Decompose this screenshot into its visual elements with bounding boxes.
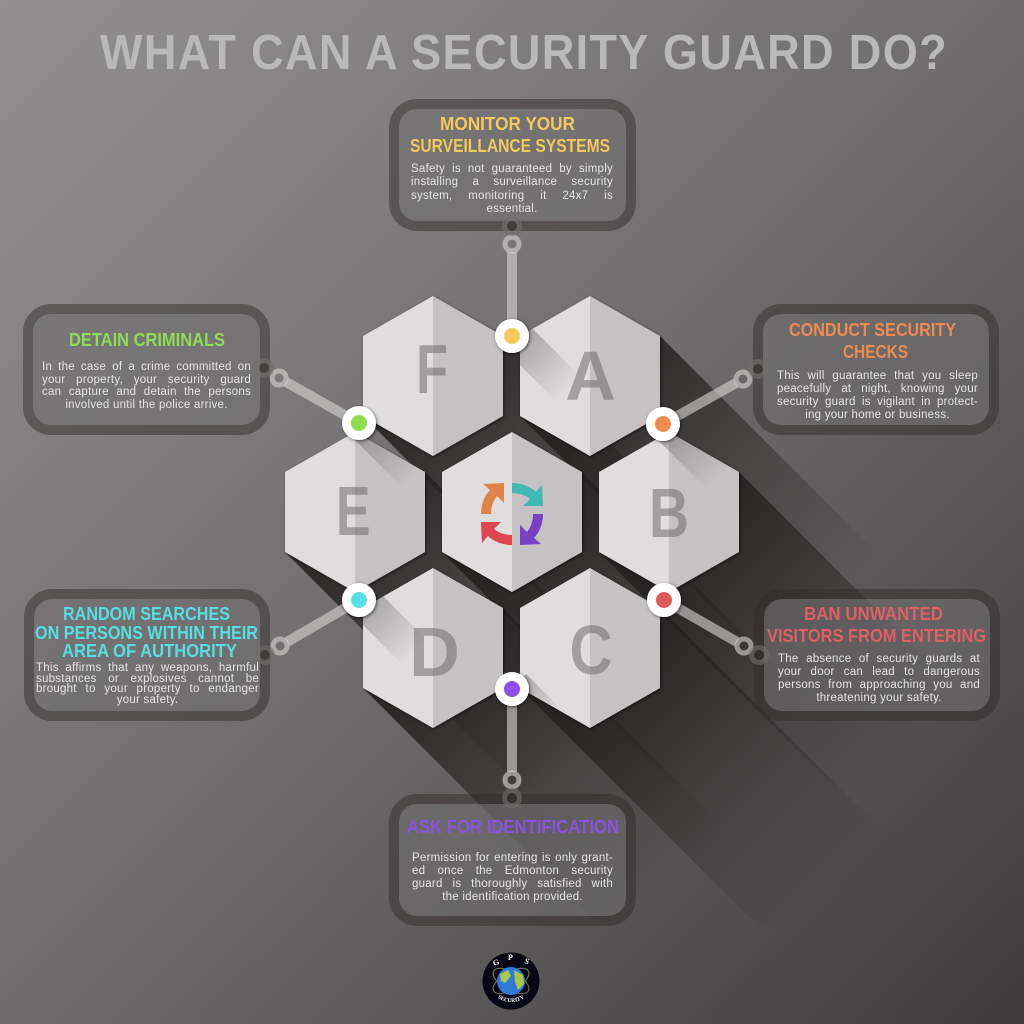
- text: random searches: brought to your property to endanger: [36, 683, 259, 695]
- text: monitor: system, monitoring it 24x7 is: [411, 190, 613, 202]
- hexagon C: [520, 568, 662, 729]
- panel: monitor your surveillance systems: [389, 99, 636, 236]
- panel: detain criminals: [23, 304, 274, 435]
- text: detain: [42, 361, 251, 410]
- hexagon C: C: [570, 611, 612, 689]
- text: ban unwanted: your door can lead to dangerous: [778, 666, 980, 678]
- text: detain: In the case of a crime committed on: [42, 361, 251, 373]
- heading: random searches: [35, 604, 258, 661]
- text: identification: [412, 852, 613, 903]
- heading: random searches: RANDOM SEARCHES: [63, 604, 230, 624]
- heading: random searches: AREA OF AUTHORITY: [62, 641, 237, 661]
- text: detain: involved until the police arrive.: [65, 398, 228, 410]
- connector nub: [749, 645, 769, 665]
- text: identification: guard is thoroughly satisfied with: [412, 878, 613, 890]
- long hexagon shadows: [285, 336, 969, 958]
- hexagon A: A: [565, 337, 616, 415]
- hexagon B: B: [649, 474, 689, 552]
- text: conduct: security guard is vigilant in protect-: [777, 396, 978, 408]
- connector nub: [255, 645, 275, 665]
- connector: top: [505, 237, 519, 336]
- hexagon D: D: [409, 613, 460, 691]
- heading: conduct: CONDUCT SECURITY: [789, 320, 956, 340]
- text: detain: can capture and detain the persons: [42, 386, 251, 398]
- heading: conduct: CHECKS: [843, 342, 908, 362]
- panel: conduct security checks: [748, 304, 999, 435]
- text: monitor: [411, 163, 613, 215]
- heading: random searches: ON PERSONS WITHIN THEIR: [35, 623, 258, 643]
- text: conduct: This will guarantee that you sleep: [777, 370, 978, 382]
- connector nub: [748, 359, 768, 379]
- text: detain: your property, your security guard: [42, 374, 251, 386]
- text: monitor: Safety is not guaranteed by simply: [411, 163, 613, 175]
- connector: upper right: [663, 372, 750, 424]
- icon: cycle arrows: [481, 483, 543, 545]
- node: red: [647, 583, 681, 617]
- node: yellow: [495, 319, 529, 353]
- heading: ban unwanted: VISITORS FROM ENTERING: [767, 626, 986, 646]
- hexagon F: [363, 296, 503, 456]
- text: monitor: installing a surveillance security: [411, 176, 613, 188]
- node: green: [342, 406, 376, 440]
- hexagon centre with cycle arrows: [442, 432, 582, 592]
- logo: GPS Security: S: [523, 956, 531, 967]
- heading: monitor: SURVEILLANCE SYSTEMS: [410, 136, 610, 156]
- hexagon F: F: [416, 330, 448, 408]
- text: conduct: [777, 370, 978, 421]
- text: conduct: peacefully at night, knowing your: [777, 383, 978, 395]
- text: random searches: This affirms that any weapons, harmful: [36, 662, 259, 674]
- connector: lower left: [273, 600, 359, 653]
- heading: ban unwanted: [767, 604, 986, 646]
- connector nub: [254, 358, 274, 378]
- heading: conduct: [789, 320, 956, 362]
- node: teal: [342, 583, 376, 617]
- logo: GPS Security: P: [508, 953, 513, 962]
- heading: detain: DETAIN CRIMINALS: [69, 330, 225, 350]
- hexagon E: E: [336, 472, 370, 550]
- title: WHAT CAN A SECURITY GUARD DO?: [100, 26, 948, 80]
- text: ban unwanted: persons from approaching you and: [778, 679, 980, 691]
- heading: monitor: [410, 114, 610, 156]
- logo: GPS Security: [482, 952, 540, 1010]
- heading: identification: ASK FOR IDENTIFICATION: [407, 817, 619, 837]
- text: identification: Permission for entering is only grant-: [412, 852, 613, 864]
- panel: ban unwanted visitors: [749, 589, 1000, 721]
- text: ban unwanted: [778, 653, 980, 704]
- text: monitor: essential.: [486, 203, 538, 215]
- connector: upper left: [272, 371, 359, 423]
- connector nub: [502, 216, 522, 236]
- hexagon B: [599, 436, 741, 589]
- text: ban unwanted: threatening your safety.: [816, 692, 942, 704]
- node: orange: [646, 407, 680, 441]
- text: random searches: [36, 662, 259, 706]
- heading: monitor: MONITOR YOUR: [440, 114, 575, 134]
- hexagon E: [284, 436, 427, 588]
- panel: ask for identification: [389, 788, 636, 926]
- text: random searches: substances or explosives cannot be: [36, 673, 259, 685]
- text: ban unwanted: The absence of security guards at: [778, 653, 980, 665]
- node: purple: [495, 672, 529, 706]
- panel: random searches: [24, 589, 275, 721]
- heading: ban unwanted: BAN UNWANTED: [804, 604, 943, 624]
- logo: GPS Security: SECURITY: [498, 994, 524, 1002]
- hexagon A: [505, 296, 660, 456]
- text: conduct: ing your home or business.: [805, 409, 950, 421]
- connector: lower right: [664, 600, 751, 653]
- logo: GPS Security: G: [492, 957, 501, 968]
- text: identification: ed once the Edmonton security: [412, 865, 613, 877]
- connector nub: [502, 788, 522, 808]
- hexagon D: [352, 568, 503, 728]
- text: random searches: your safety.: [117, 694, 178, 706]
- connector: bottom: [505, 689, 519, 787]
- text: identification: the identification provided.: [442, 891, 583, 903]
